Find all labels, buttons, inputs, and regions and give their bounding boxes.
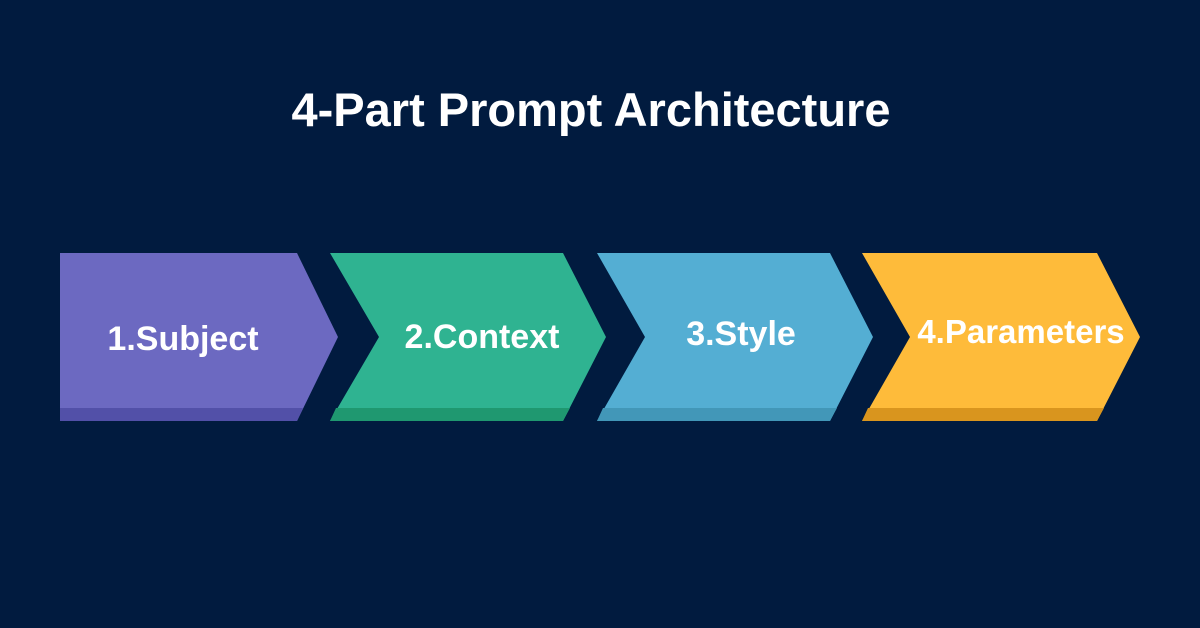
step 2: Context — [330, 253, 606, 421]
step 2: Context: 2.Context — [405, 318, 559, 356]
step 1: Subject: 1.Subject — [107, 320, 259, 358]
step 1: Subject — [60, 253, 338, 421]
step 3: Style: 3.Style — [686, 315, 796, 353]
title: 4-Part Prompt Architecture — [292, 83, 890, 136]
step 4: Parameters: 4.Parameters — [917, 313, 1125, 350]
step 4: Parameters — [862, 253, 1140, 421]
step 3: Style — [597, 253, 873, 421]
